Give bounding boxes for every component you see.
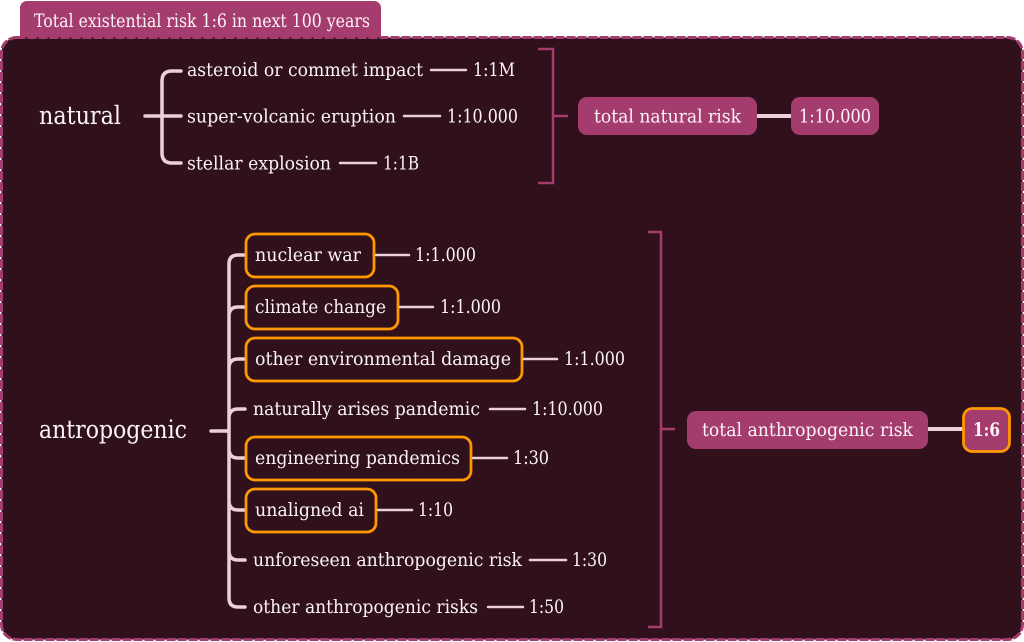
heading: natural: natural <box>39 101 121 130</box>
total anthropogenic risk: 1:6 <box>973 420 1000 441</box>
item: climate change: 1:1.000 <box>440 297 501 318</box>
item: other environmental damage: 1:1.000 <box>564 349 625 370</box>
heading: antropogenic: antropogenic <box>39 415 187 444</box>
item: engineering pandemics: engineering pandemics <box>255 448 460 469</box>
item: other anthropogenic risks: 1:50 <box>529 597 564 618</box>
item: nuclear war <box>246 234 476 277</box>
total natural risk <box>578 97 879 135</box>
item: other environmental damage <box>246 338 625 381</box>
item: other environmental damage: other environmental damage <box>255 349 511 370</box>
item: climate change <box>246 286 501 329</box>
item: unforeseen anthropogenic risk: 1:30 <box>572 550 607 571</box>
item: super-volcanic: 1:10.000 <box>447 106 518 128</box>
item: nuclear war: 1:1.000 <box>415 245 476 266</box>
item: naturally arises pandemic: 1:10.000 <box>532 399 603 420</box>
item: naturally arises pandemic <box>253 399 603 420</box>
bracket: anthropogenic <box>648 232 675 627</box>
item: nuclear war: nuclear war <box>255 245 361 266</box>
item: unforeseen anthropogenic risk: unforeseen anthropogenic risk <box>253 550 523 571</box>
tree connector: natural <box>145 71 181 163</box>
panel: natural risks <box>39 49 879 183</box>
panel: anthropogenic risks <box>39 232 1010 627</box>
item: stellar: stellar explosion <box>187 154 331 174</box>
item: super-volcanic: super-volcanic eruption <box>187 106 396 128</box>
item: super-volcanic <box>187 106 518 128</box>
item: other anthropogenic risks: other anthropogenic risks <box>253 597 478 618</box>
title tab <box>20 1 381 38</box>
item: climate change: climate change <box>255 297 386 318</box>
item: naturally arises pandemic: naturally arises pandemic <box>253 399 480 420</box>
item: stellar: 1:1B <box>383 154 419 174</box>
bracket: natural <box>538 49 568 183</box>
item: engineering pandemics: 1:30 <box>513 448 549 469</box>
item: unaligned ai <box>246 489 453 532</box>
item: asteroid: asteroid or commet impact <box>187 60 424 81</box>
tree connector: anthropogenic <box>211 255 245 607</box>
item: asteroid: 1:1M <box>473 60 515 81</box>
item: engineering pandemics <box>246 437 549 480</box>
item: unaligned ai: unaligned ai <box>255 500 364 521</box>
item: stellar <box>187 154 419 174</box>
total anthropogenic risk <box>687 408 1010 452</box>
total natural risk: total natural risk <box>594 106 742 128</box>
total anthropogenic risk: total anthropogenic risk <box>702 420 914 441</box>
title tab: Total existential risk 1:6 in next 100 years <box>34 11 370 32</box>
item: unaligned ai: 1:10 <box>418 500 453 521</box>
total natural risk: 1:10.000 <box>799 106 871 128</box>
